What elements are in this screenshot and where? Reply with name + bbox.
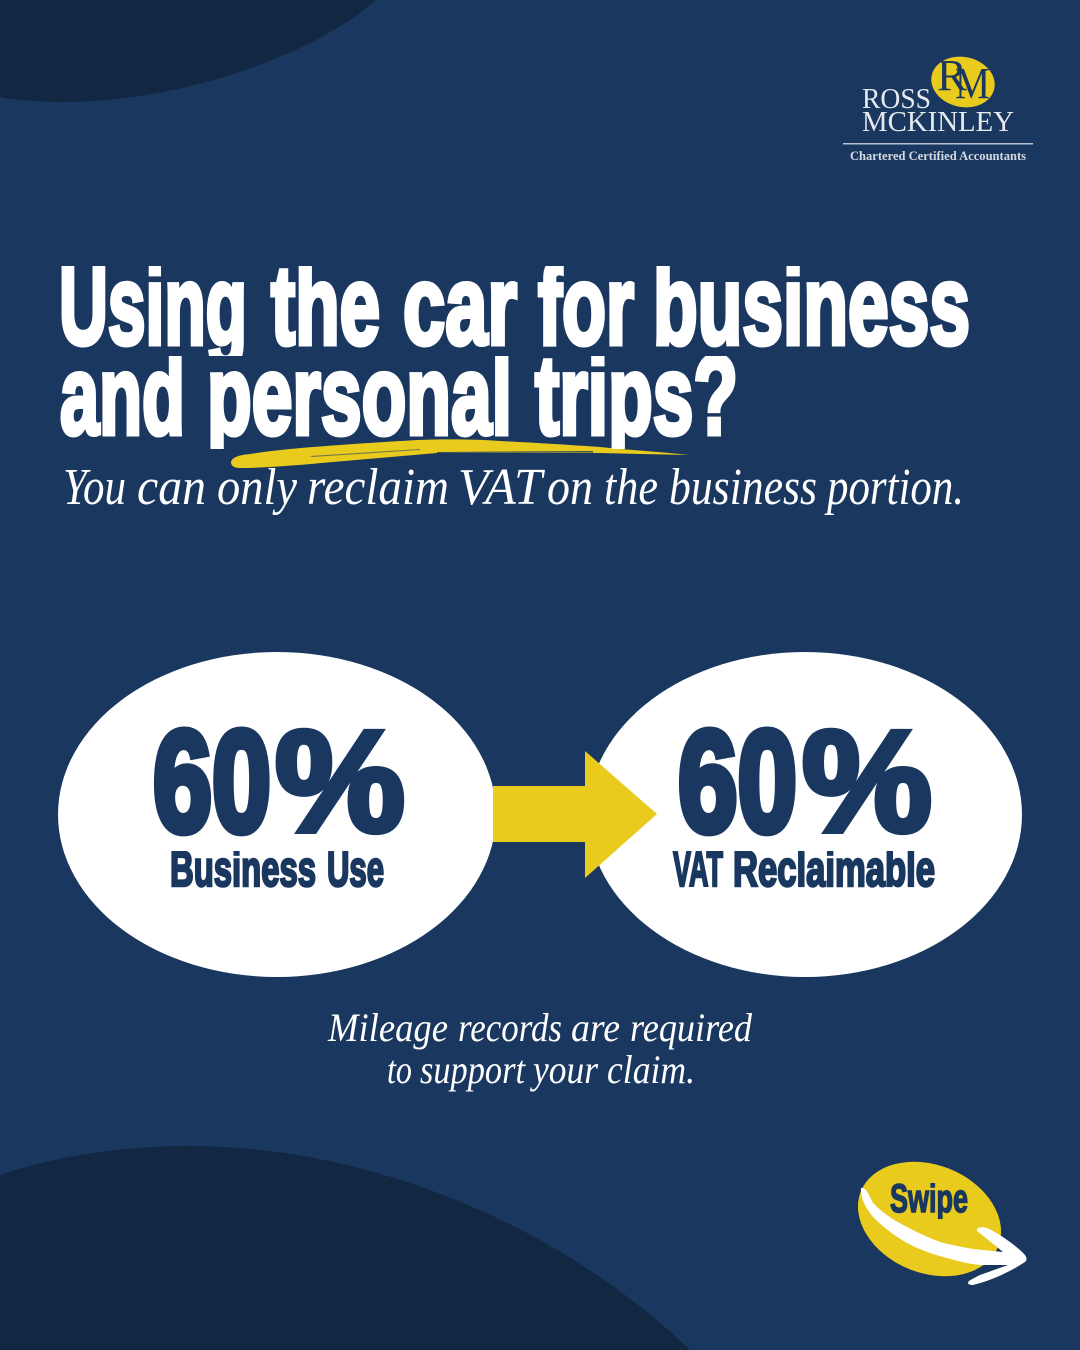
title: for	[538, 243, 634, 368]
subtitle: You	[63, 459, 126, 516]
logo: wordmark McKinley: MCKINLEY	[862, 107, 1014, 138]
note: mileage records: to	[387, 1047, 412, 1092]
logo: tagline: Chartered Certified Accountants	[850, 149, 1026, 163]
panel: business use oval	[58, 652, 496, 977]
arrow: business use to VAT reclaimable	[493, 751, 657, 878]
logo: yellow oval	[927, 51, 999, 113]
subtitle	[63, 459, 964, 516]
title: Using	[59, 243, 247, 368]
logo: wordmark Ross: ROSS	[862, 84, 931, 115]
subtitle: reclaim	[307, 459, 449, 516]
title: the	[271, 243, 380, 368]
panel: VAT reclaimable oval	[588, 652, 1022, 977]
subtitle: the	[604, 459, 658, 516]
title: and	[60, 333, 185, 458]
note: mileage records: required	[630, 1005, 753, 1050]
label: business use: Use	[327, 841, 384, 897]
label: VAT reclaimable	[672, 851, 935, 888]
label: business use	[171, 851, 384, 888]
label: VAT reclaimable: Reclaimable	[733, 841, 935, 897]
note: mileage records: claim.	[607, 1047, 695, 1092]
title	[60, 266, 969, 449]
logo: letter M: M	[955, 59, 990, 108]
note: mileage records: support	[420, 1047, 526, 1092]
swipe badge	[858, 1162, 1026, 1285]
yellow brush underline	[231, 439, 689, 468]
label: business use: Business	[170, 841, 316, 897]
logo: Ross McKinley	[843, 51, 1033, 163]
decorative dark shape: top left corner	[0, 0, 376, 102]
note: mileage records	[327, 1005, 753, 1092]
note: mileage records: Mileage	[327, 1005, 448, 1050]
subtitle: can	[137, 459, 206, 516]
logo: letter R: R	[937, 51, 968, 100]
title: personal	[207, 333, 512, 458]
subtitle: VAT	[458, 459, 545, 516]
stat: 60 percent VAT reclaimable: 60	[678, 701, 797, 862]
stat: 60 percent business use: %	[275, 701, 405, 862]
subtitle: on	[547, 459, 593, 516]
swipe: label: Swipe	[890, 1177, 968, 1221]
decorative dark shape: bottom left corner	[0, 1146, 690, 1350]
swipe: white arrow	[861, 1188, 1026, 1285]
subtitle: business	[669, 459, 817, 516]
note: mileage records: records	[458, 1005, 562, 1050]
title: trips?	[535, 333, 738, 458]
note: mileage records: your	[529, 1047, 598, 1092]
stat: 60 percent business use: 60	[153, 701, 271, 862]
title: car	[403, 243, 517, 368]
stat: 60 percent VAT reclaimable: %	[802, 701, 932, 862]
swipe: yellow oval	[841, 1141, 1018, 1297]
note: mileage records: are	[571, 1005, 620, 1050]
subtitle: portion.	[824, 459, 964, 516]
label: VAT reclaimable: VAT	[673, 841, 723, 897]
subtitle: only	[217, 459, 298, 516]
